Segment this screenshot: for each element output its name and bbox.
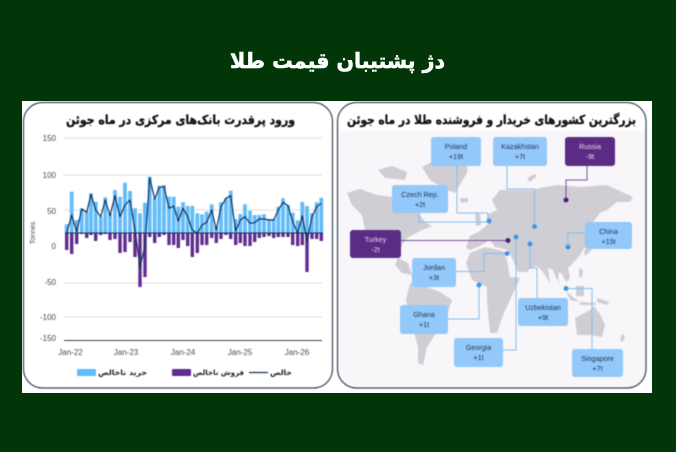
location dots: [476, 198, 570, 291]
callout: Uzbekistan: [518, 298, 568, 326]
panel frame: [338, 102, 646, 388]
panel: world map buyers and sellers: [337, 102, 647, 389]
callout: Russia: Russia: [579, 142, 601, 151]
callout: Jordan: Jordan: [423, 263, 445, 272]
x axis labels: Jan-22: [58, 348, 83, 357]
gross purchases bars: [67, 177, 321, 233]
net line: [67, 178, 321, 267]
map background: [339, 132, 644, 386]
panel: central bank chart: [24, 102, 332, 388]
callout: Georgia: Georgia: [466, 343, 491, 352]
legend: فروش ناخالص: [193, 368, 244, 377]
grid lines: [64, 138, 322, 317]
callout: Georgia: [454, 338, 503, 367]
panel frame: [24, 102, 332, 388]
callout: Turkey: -2t: [371, 245, 380, 254]
x axis line: [64, 340, 322, 342]
y axis labels: -50: [44, 278, 57, 287]
callout: Jordan: [412, 258, 456, 287]
y axis labels: 0: [52, 242, 57, 251]
chart heading: ورود پرقدرت بانک‌های مرکزی در ماه جوئن: [66, 112, 295, 127]
x axis labels: Jan-23: [114, 348, 139, 357]
callout: Singapore: Singapore: [581, 354, 614, 363]
callout: Uzbekistan: +9t: [538, 313, 548, 322]
callout: Kazakhstan: +7t: [515, 152, 525, 161]
x axis labels: Jan-24: [171, 348, 196, 357]
y axis title: Tonnes: [30, 221, 37, 244]
baseline: [65, 232, 323, 234]
callout: Ghana: +1t: [419, 320, 429, 329]
world map continents: [347, 158, 633, 365]
y axis labels: [40, 134, 57, 343]
callout: Kazakhstan: [493, 137, 547, 166]
legend: خالص: [270, 368, 292, 377]
callout: Singapore: +7t: [592, 364, 603, 373]
title: دژ پشتیبان قیمت طلا: [230, 49, 445, 73]
callout: Uzbekistan: Uzbekistan: [525, 303, 561, 312]
callout: Czech Rep.: Czech Rep.: [401, 190, 439, 199]
callout: China: China: [599, 227, 618, 236]
callout: Russia: [565, 137, 615, 166]
y axis labels: 100: [43, 171, 57, 180]
callout: Turkey: Turkey: [365, 235, 387, 244]
x axis labels: Jan-26: [285, 348, 310, 357]
callout: Czech Rep.: [392, 185, 448, 213]
y axis labels: 150: [43, 134, 57, 143]
callout: China: +15t: [601, 237, 616, 246]
callout: Poland: [431, 137, 481, 166]
callout: China: [585, 222, 632, 249]
gross sales bars: [67, 233, 321, 287]
legend: خرید ناخالص: [98, 368, 147, 377]
y axis labels: 50: [47, 207, 57, 216]
callout: Ghana: Ghana: [413, 310, 435, 319]
callout: Georgia: +1t: [473, 353, 484, 362]
callout: Czech Rep.: +2t: [415, 200, 425, 209]
callout: Poland: +19t: [449, 152, 463, 161]
callout: Kazakhstan: Kazakhstan: [501, 142, 539, 151]
x axis labels: [58, 348, 310, 357]
y axis labels: -150: [40, 334, 57, 343]
callout: Russia: -9t: [586, 152, 594, 161]
white content background: [22, 101, 652, 393]
callout: Poland: Poland: [445, 142, 467, 151]
callout: Singapore: [572, 349, 623, 377]
callout: Jordan: +3t: [429, 273, 439, 282]
legend: [77, 368, 292, 377]
connectors: buyers: [419, 166, 592, 350]
callout: Turkey: [350, 230, 401, 258]
connectors: sellers: [401, 166, 587, 240]
y axis labels: -100: [40, 313, 57, 322]
callout: Ghana: [400, 305, 448, 334]
x axis labels: Jan-25: [228, 348, 253, 357]
